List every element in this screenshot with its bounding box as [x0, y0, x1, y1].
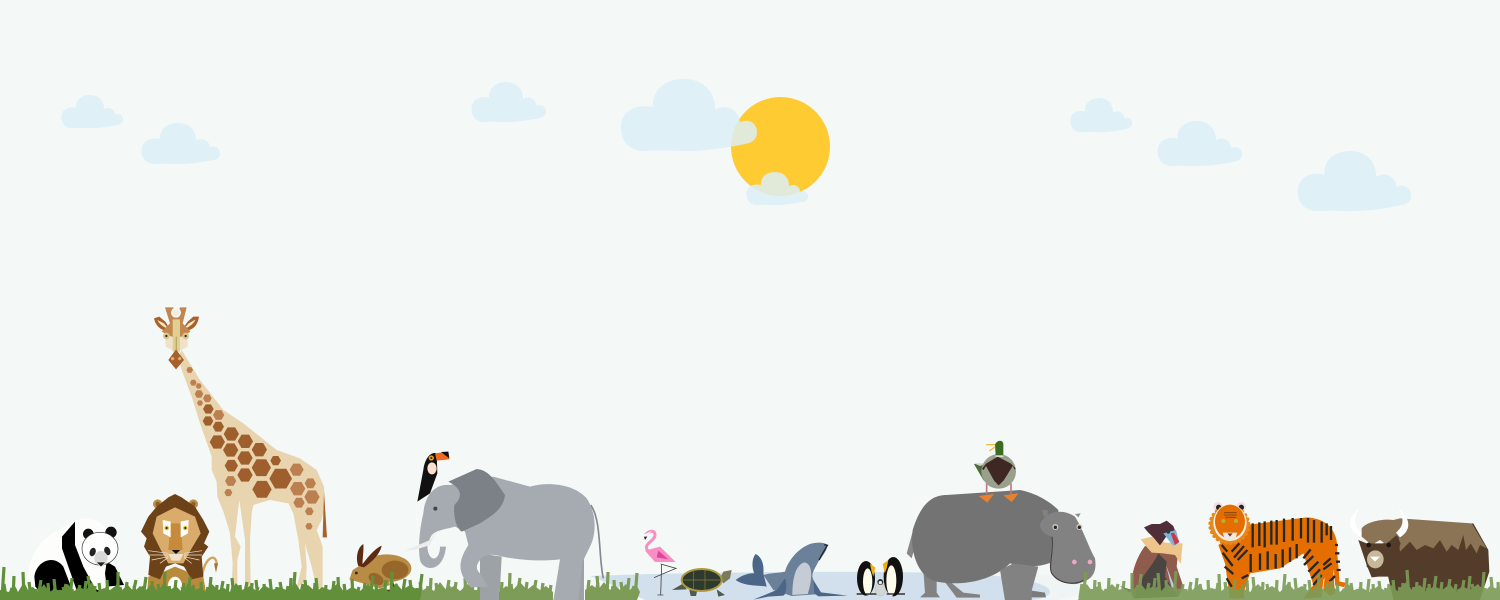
hippo foreleg: [1000, 563, 1038, 600]
hippo body: [912, 490, 1058, 583]
cloud 6: [1070, 98, 1132, 132]
hippo head: [1040, 512, 1095, 584]
tiger stripes: [1222, 518, 1341, 587]
hippo mouth: [1051, 537, 1083, 583]
penguins: [857, 557, 905, 596]
tiger: [1210, 502, 1345, 599]
hippo eyes: [1052, 524, 1058, 530]
grass behind elephant: [420, 578, 482, 600]
giraffe spots: [186, 367, 320, 530]
tiger face: [1213, 504, 1247, 541]
cloud 1: [61, 95, 123, 128]
seal front flipper: [813, 580, 848, 596]
tiger ears: [1213, 502, 1223, 511]
yak eyes: [1366, 543, 1371, 547]
elephant tusk: [405, 532, 437, 551]
lion mane: [141, 494, 209, 579]
hippo: [907, 490, 1095, 600]
pond: [590, 572, 1050, 600]
yak muzzle: [1367, 550, 1384, 568]
grass left: [0, 567, 422, 600]
toucan: [417, 452, 449, 502]
cloud 2: [142, 123, 220, 164]
hippo hind legs: [920, 570, 940, 597]
duck neck ring: [996, 455, 1003, 457]
flamingo body: [645, 547, 676, 562]
grass left blades: [2, 567, 422, 598]
mandrill hair: [1144, 521, 1176, 545]
tiger ruff: [1210, 507, 1249, 543]
panda rear leg: [34, 560, 74, 596]
flamingo: [643, 531, 676, 595]
panda front leg: [105, 562, 124, 587]
seal tail: [736, 554, 767, 587]
turtle: [672, 569, 732, 597]
duck legs: [987, 483, 1011, 494]
cloud 7: [1158, 121, 1242, 166]
hare body: [362, 554, 411, 582]
clouds: [61, 79, 1411, 211]
grass mass: [420, 582, 482, 600]
seal: [736, 543, 848, 600]
panda: [28, 519, 124, 597]
turtle legs and tail: [672, 583, 725, 597]
turtle head: [720, 570, 732, 583]
lion ears: [153, 499, 162, 509]
chick: [875, 579, 886, 596]
grass middle blades: [501, 572, 637, 598]
duck beak: [986, 445, 995, 451]
grass right: [1078, 570, 1500, 600]
hippo ears: [1042, 510, 1048, 517]
hare: [349, 544, 411, 591]
cloud 8: [1298, 151, 1411, 211]
flamingo neck: [645, 531, 655, 552]
toucan body: [417, 453, 437, 502]
elephant body: [419, 477, 595, 600]
mandrill body: [1131, 546, 1183, 598]
far legs: [480, 553, 502, 600]
mandrill face: [1163, 530, 1179, 546]
turtle shell: [682, 569, 722, 591]
yak head: [1358, 535, 1401, 577]
yak: [1350, 509, 1489, 600]
tiger body: [1218, 517, 1337, 598]
lion: [141, 494, 218, 600]
mandrill arm highlight: [1166, 565, 1175, 588]
panda white body: [28, 519, 123, 597]
seal hind flipper: [753, 578, 786, 600]
grass right mass: [1078, 582, 1500, 600]
giraffe head: [154, 307, 199, 369]
panda black band: [62, 522, 103, 597]
duck feet: [979, 493, 1019, 503]
lion face: [153, 507, 201, 563]
elephant eye: [433, 507, 437, 511]
panda head: [82, 527, 118, 567]
sun: [731, 97, 830, 196]
duck head: [995, 441, 1003, 455]
hippo far foreleg: [1023, 580, 1046, 597]
water: [590, 572, 1085, 600]
hare haunch: [382, 561, 408, 579]
right penguin: [883, 557, 905, 596]
elephant tail: [591, 505, 603, 578]
cloud 4: [621, 79, 757, 151]
grass right blades: [1080, 570, 1499, 598]
yak body: [1367, 523, 1489, 600]
grass middle mass: [499, 582, 640, 600]
giraffe: [154, 307, 327, 588]
lion tail: [202, 558, 217, 580]
cloud 3: [472, 82, 546, 122]
hippo tail: [907, 532, 915, 558]
duck: [974, 441, 1019, 503]
grass blades: [420, 578, 479, 598]
tiger near hind leg: [1303, 548, 1330, 599]
seal muzzle: [819, 545, 827, 560]
giraffe body: [178, 350, 325, 588]
duck chest: [982, 457, 1016, 485]
tiger tail: [1334, 545, 1345, 585]
cloud 5: [746, 172, 808, 205]
elephant ear: [448, 469, 505, 532]
flamingo legs: [654, 564, 676, 595]
hare ears: [357, 544, 363, 567]
mandrill shade: [1135, 553, 1177, 598]
duck tail: [974, 463, 992, 487]
grass middle: [499, 572, 640, 600]
giraffe tail: [323, 492, 327, 537]
hare leg: [373, 580, 395, 591]
elephant: [405, 469, 603, 600]
yak horns: [1350, 509, 1362, 537]
hippo nostrils: [1072, 560, 1077, 564]
duck body: [981, 454, 1016, 489]
grass left mass: [0, 582, 420, 600]
seal belly: [792, 562, 811, 595]
mandrill mane: [1141, 536, 1183, 564]
toucan beak: [435, 452, 449, 461]
lion body: [147, 567, 207, 600]
left penguin: [857, 561, 877, 596]
pale shore: [915, 572, 1085, 600]
mandrill: [1120, 521, 1183, 598]
seal body: [763, 543, 827, 596]
yak back fur: [1362, 518, 1487, 553]
